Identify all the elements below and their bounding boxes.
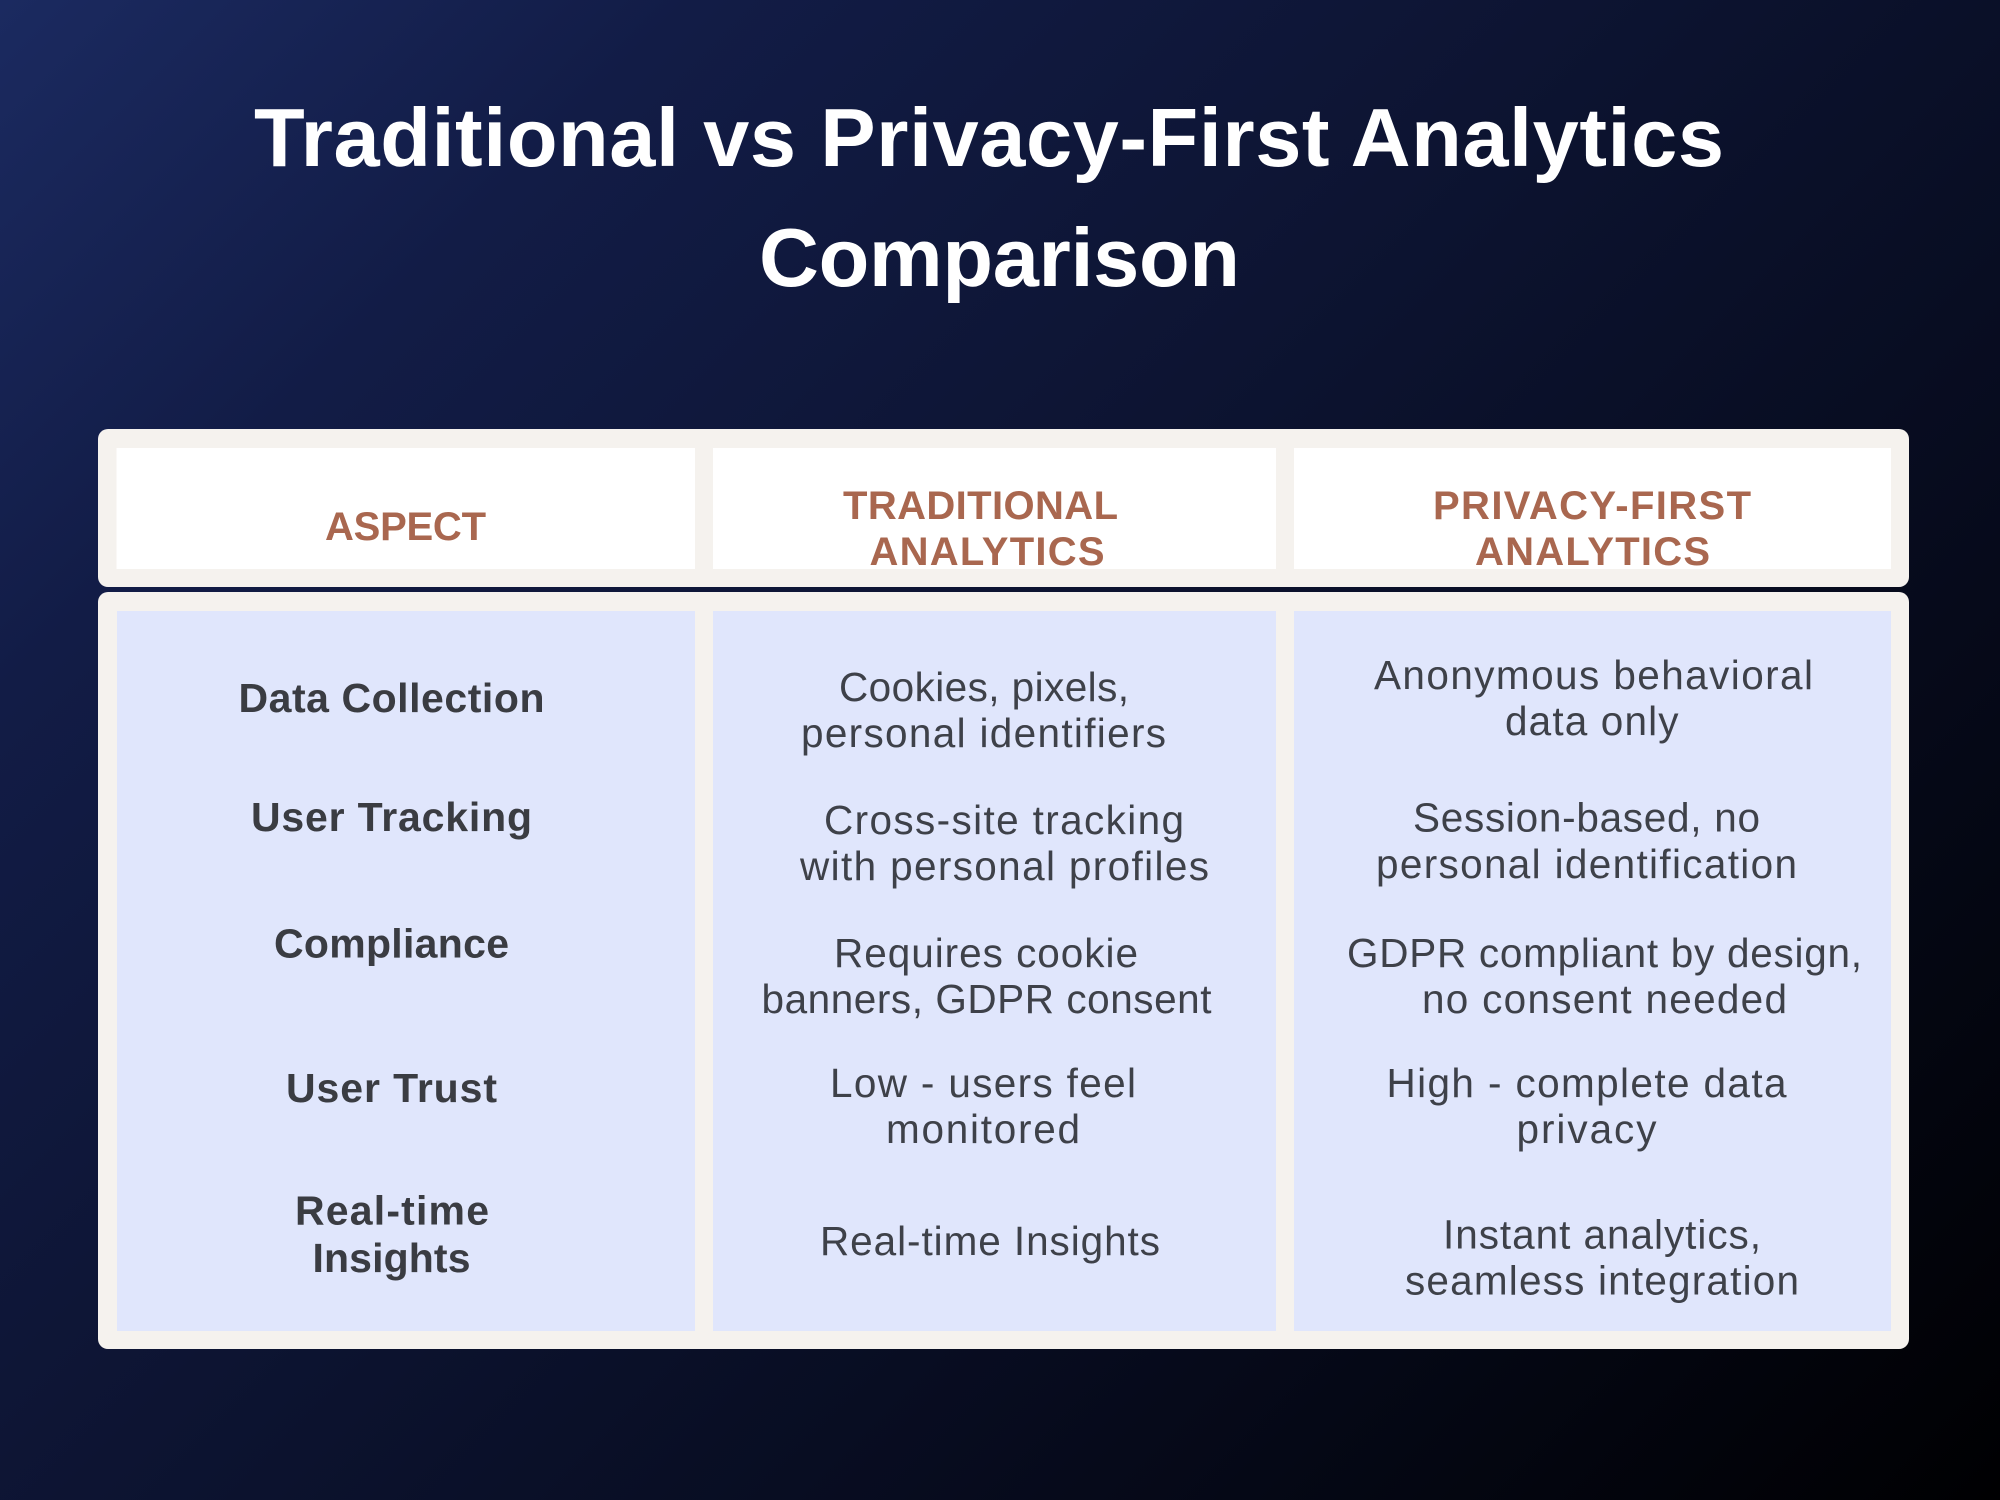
- row label: user tracking: User Tracking: [251, 794, 532, 840]
- header cell: privacy-first analytics: [1294, 448, 1891, 574]
- row label: data collection: Data Collection: [238, 675, 544, 721]
- cell: real-time privacy-first: [1405, 1212, 1799, 1304]
- cell: data collection traditional: [801, 664, 1166, 756]
- title: [254, 91, 1724, 304]
- header cell: traditional analytics: TRADITIONAL: [843, 484, 1118, 528]
- cell: user trust traditional: Low - users feel: [830, 1060, 1136, 1106]
- cell: real-time privacy-first: Instant analytics,: [1443, 1212, 1761, 1258]
- cell: data collection traditional: Cookies, pixels,: [839, 664, 1129, 710]
- header cell: traditional analytics: [713, 448, 1276, 574]
- cell: user tracking privacy-first: Session-based, no: [1413, 794, 1760, 840]
- title: Traditional vs Privacy-First Analytics: [254, 91, 1724, 184]
- column: privacy-first analytics: [1294, 611, 1891, 1331]
- cell: real-time privacy-first: seamless integration: [1405, 1258, 1799, 1304]
- cell: data collection privacy-first: data only: [1505, 698, 1679, 744]
- cell: compliance privacy-first: GDPR compliant by design,: [1347, 930, 1862, 976]
- cell: compliance traditional: [762, 930, 1212, 1022]
- row label: user trust: User Trust: [286, 1065, 497, 1111]
- panel: table header: [98, 429, 1909, 587]
- cell: data collection privacy-first: [1374, 652, 1813, 744]
- row label: real-time insights: [295, 1188, 489, 1281]
- cell: real-time traditional: Real-time Insights: [820, 1218, 1160, 1264]
- cell: data collection privacy-first: Anonymous behavioral: [1374, 652, 1813, 698]
- cell: user tracking traditional: with personal profiles: [799, 843, 1209, 889]
- cell: user trust traditional: [830, 1060, 1136, 1152]
- cell: data collection traditional: personal identifiers: [801, 710, 1166, 756]
- cell: compliance privacy-first: no consent needed: [1422, 976, 1787, 1022]
- header cell: privacy-first analytics: ANALYTICS: [1475, 530, 1710, 574]
- cell: compliance traditional: banners, GDPR consent: [762, 976, 1212, 1022]
- row label: compliance: Compliance: [274, 920, 509, 966]
- column: traditional analytics: [713, 611, 1276, 1331]
- cell: user tracking traditional: [799, 797, 1209, 889]
- header cell: traditional analytics: ANALYTICS: [870, 530, 1104, 574]
- cell: compliance traditional: Requires cookie: [834, 930, 1138, 976]
- cell: user trust privacy-first: [1386, 1060, 1787, 1152]
- cell: user tracking traditional: Cross-site tracking: [824, 797, 1184, 843]
- header cell: privacy-first analytics: PRIVACY-FIRST: [1433, 484, 1751, 528]
- cell: compliance privacy-first: [1347, 930, 1862, 1022]
- header cell: aspect: ASPECT: [325, 505, 486, 549]
- cell: user trust privacy-first: privacy: [1516, 1106, 1657, 1152]
- row label: real-time insights: Real-time: [295, 1188, 489, 1234]
- title: Comparison: [759, 211, 1240, 304]
- column: aspect: [117, 611, 695, 1331]
- cell: user tracking privacy-first: [1376, 794, 1797, 887]
- panel: table body: [98, 592, 1909, 1349]
- cell: user trust privacy-first: High - complete data: [1386, 1060, 1787, 1106]
- header cell: aspect: [116, 448, 695, 569]
- cell: user trust traditional: monitored: [886, 1106, 1080, 1152]
- row label: real-time insights: Insights: [312, 1235, 470, 1281]
- cell: user tracking privacy-first: personal identification: [1376, 841, 1797, 887]
